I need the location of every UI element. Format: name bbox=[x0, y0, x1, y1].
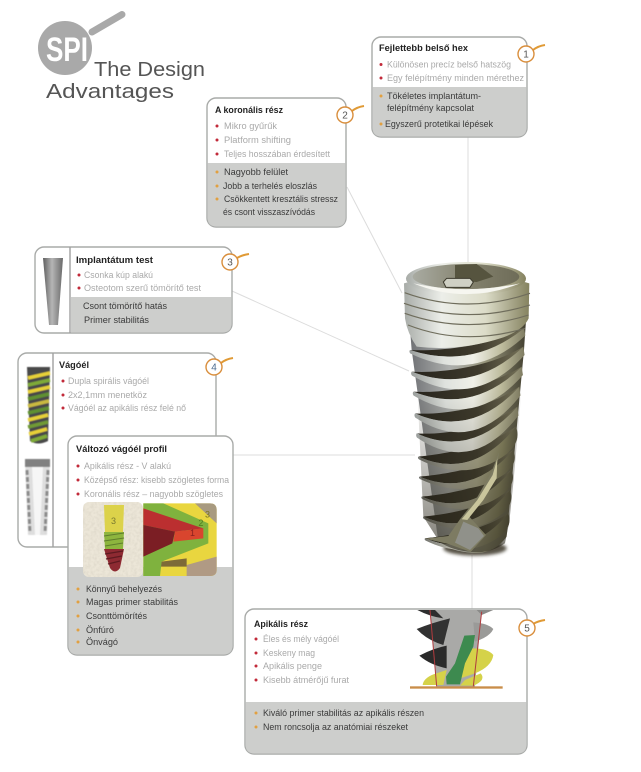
benefits list: és csont visszaszívódás bbox=[223, 207, 315, 218]
benefits list: Magas primer stabilitás bbox=[86, 597, 178, 608]
panel: apikális rész bbox=[245, 609, 545, 754]
features list: Vágóél az apikális rész felé nő bbox=[68, 403, 186, 414]
marker 3: 3 bbox=[227, 258, 233, 268]
benefits list: Önfúró bbox=[86, 625, 114, 636]
title line 2: Advantages bbox=[46, 81, 174, 103]
implant shadow bbox=[443, 541, 507, 556]
benefits list bbox=[83, 301, 167, 326]
benefits list: Jobb a terhelés eloszlás bbox=[223, 181, 317, 192]
image: coloured cutting-edge implant bbox=[27, 367, 50, 444]
logo text SPI: SPI bbox=[46, 31, 88, 69]
panel: vágóél bbox=[18, 353, 233, 547]
features list: 2x2,1mm menetköz bbox=[68, 390, 147, 401]
panel: belső hex bbox=[372, 37, 545, 137]
benefits list: Csont tömörítő hatás bbox=[83, 301, 167, 312]
icon: magnifier lens bbox=[38, 21, 92, 75]
lower grey section bbox=[208, 163, 345, 226]
marker 2 bbox=[337, 106, 364, 123]
implant hex socket bbox=[443, 278, 473, 287]
lower grey section bbox=[373, 87, 526, 136]
image: thread profile zones, bone view bbox=[83, 502, 143, 577]
benefits list: Nem roncsolja az anatómiai részeket bbox=[263, 722, 408, 733]
benefits list: Kiváló primer stabilitás az apikális részen bbox=[263, 708, 424, 719]
image: implant cross-section bbox=[25, 459, 50, 535]
features list: Keskeny mag bbox=[263, 648, 315, 659]
icon: cone body bbox=[43, 258, 63, 325]
features list: Különösen precíz belső hatszög bbox=[387, 60, 511, 70]
heading: Implantátum test bbox=[76, 255, 154, 266]
heading: Változó vágóél profil bbox=[76, 444, 167, 455]
benefits list: felépítmény kapcsolat bbox=[387, 103, 474, 114]
implant apical blade bbox=[425, 452, 499, 552]
features list bbox=[216, 121, 330, 160]
features list bbox=[254, 634, 349, 686]
features list: Platform shifting bbox=[224, 135, 291, 146]
panel: koronális rész bbox=[207, 98, 364, 227]
marker 1 bbox=[518, 45, 545, 62]
benefits list: Nagyobb felület bbox=[224, 167, 288, 178]
benefits list: Csökkentett kresztális stressz bbox=[224, 194, 338, 205]
icon: magnifier handle bbox=[92, 14, 122, 32]
marker 4: 4 bbox=[211, 362, 217, 374]
heading: Apikális rész bbox=[254, 619, 308, 630]
heading: Fejlettebb belső hex bbox=[379, 43, 469, 54]
image: apical section bbox=[410, 610, 503, 689]
marker 5 bbox=[519, 620, 545, 636]
features list bbox=[380, 60, 524, 84]
implant top rim bbox=[406, 262, 526, 295]
features list: Mikro gyűrűk bbox=[224, 121, 277, 132]
lower grey section bbox=[69, 567, 232, 654]
features list: Teljes hosszában érdesített bbox=[224, 149, 330, 160]
marker 5: 5 bbox=[524, 624, 530, 634]
benefits list bbox=[380, 91, 493, 130]
features list bbox=[78, 270, 201, 294]
panel: implantátum test bbox=[35, 247, 249, 333]
features list: Dupla spirális vágóél bbox=[68, 376, 149, 387]
features list: Egy felépítmény minden mérethez bbox=[387, 73, 524, 84]
features list: Csonka kúp alakú bbox=[84, 270, 153, 281]
features list: Kisebb átmérőjű furat bbox=[263, 675, 349, 686]
implant illustration bbox=[404, 262, 530, 556]
title line 1: The Design bbox=[94, 59, 205, 81]
features list bbox=[76, 461, 230, 500]
features list: Éles és mély vágóél bbox=[263, 634, 339, 645]
features list: Apikális rész - V alakú bbox=[84, 461, 171, 472]
benefits list: Csonttömörítés bbox=[86, 611, 147, 622]
marker 3 bbox=[222, 254, 249, 270]
benefits list: Tökéletes implantátum- bbox=[387, 91, 481, 102]
benefits list: Könnyű behelyezés bbox=[86, 584, 162, 595]
features list: Apikális penge bbox=[263, 661, 322, 672]
benefits list: Primer stabilitás bbox=[84, 315, 149, 326]
benefits list: Egyszerű protetikai lépések bbox=[385, 119, 493, 130]
benefits list: Önvágó bbox=[86, 637, 118, 648]
benefits list bbox=[76, 584, 178, 648]
logo: SPI The Design Advantages bbox=[38, 14, 205, 103]
marker 2: 2 bbox=[342, 110, 348, 122]
heading: Vágóél bbox=[59, 360, 89, 371]
image: thread profile zones, close-up: 2 bbox=[198, 518, 203, 528]
benefits list bbox=[216, 167, 338, 218]
benefits list bbox=[254, 708, 424, 733]
marker 4 bbox=[206, 358, 233, 375]
lower grey section bbox=[246, 702, 526, 753]
image: thread profile zones, close-up bbox=[143, 503, 217, 576]
image: thread profile zones, bone view: 3 bbox=[111, 516, 116, 526]
features list: Középső rész: kisebb szögletes forma bbox=[84, 475, 230, 486]
lower grey section bbox=[71, 297, 231, 332]
connector lines bbox=[232, 137, 472, 609]
implant collar bbox=[404, 273, 529, 348]
features list: Koronális rész – nagyobb szögletes bbox=[84, 489, 223, 500]
features list bbox=[62, 376, 186, 414]
image: thread profile zones, close-up: 1 bbox=[190, 528, 195, 538]
image: thread profile zones, close-up: 3 bbox=[205, 509, 210, 519]
implant lower shading bbox=[417, 390, 522, 552]
implant core bbox=[407, 287, 528, 553]
panel: változó vágóél profil bbox=[68, 436, 233, 655]
marker 1: 1 bbox=[523, 50, 529, 60]
heading: A koronális rész bbox=[215, 105, 283, 116]
features list: Osteotom szerű tömörítő test bbox=[84, 283, 201, 294]
